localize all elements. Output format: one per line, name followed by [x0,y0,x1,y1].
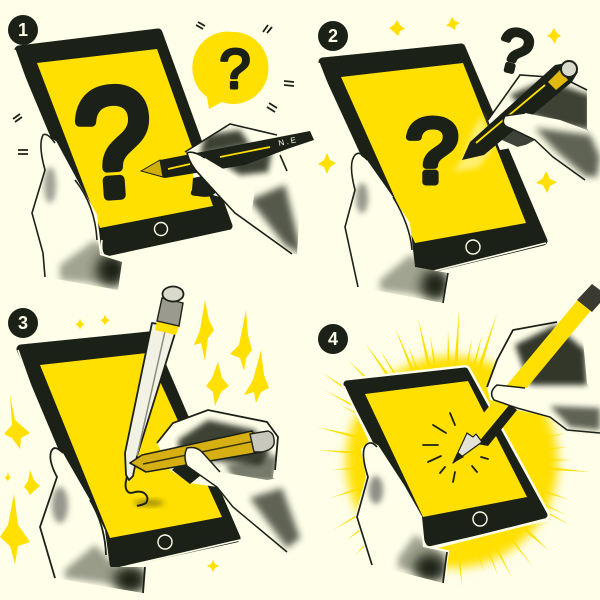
thumb 4 [492,385,600,433]
tap glow [452,115,492,172]
sparkles 3 [0,300,269,572]
right hand 2 [488,74,589,150]
step number 2: 2 [328,26,338,46]
tablet 4 [344,371,548,547]
tall white pencil [125,286,184,480]
step number 1 [8,15,38,45]
pen 1: N . E [278,135,297,148]
floating question mark: ? [491,15,539,88]
step number 4: 4 [328,329,338,349]
screen 4 [365,381,527,517]
sparkles 2 [318,17,561,193]
screen 3 [40,353,222,538]
step number 3 [8,308,38,338]
radiating sparks [423,413,488,482]
pen 2 [462,61,578,160]
step number 1: 1 [18,20,28,40]
right hand 4 [486,321,589,416]
pencil 4 [453,284,600,463]
right hand 3 [156,409,279,487]
tablet 3 [18,336,240,569]
big question mark 1: ? [69,55,157,230]
step number 3: 3 [18,313,28,333]
right hand 1 [185,124,302,255]
speech bubble [192,32,268,109]
screen 1 [37,49,213,228]
emphasis ticks 1 [13,22,294,154]
thumb 3 [185,448,303,552]
pen 1 [141,131,314,178]
step number 2 [318,21,348,51]
panel: step 3 [0,286,303,594]
home button 2 [466,240,480,254]
panel: step 1 [8,15,314,290]
left hand 1 [32,134,128,290]
question mark on screen 2: ? [406,100,458,202]
squiggle line and shadow [126,477,164,506]
screen 2 [341,63,526,243]
home button 3 [158,535,172,549]
thumb 2 [503,113,600,180]
home button 4 [473,512,487,526]
thumb 1 [187,152,292,254]
tablet 2 [319,48,546,274]
left hand 4 [357,443,447,583]
step number 4 [318,324,348,354]
panel: step 4 [317,284,600,587]
panel: step 2 [318,15,600,303]
home button 1 [154,222,168,236]
tablet 1 [15,33,232,257]
yellow pencil 3 [130,431,274,472]
left hand 2 [345,153,449,303]
starburst [317,310,590,587]
left hand 3 [40,448,146,594]
bubble question mark: ? [219,37,251,100]
